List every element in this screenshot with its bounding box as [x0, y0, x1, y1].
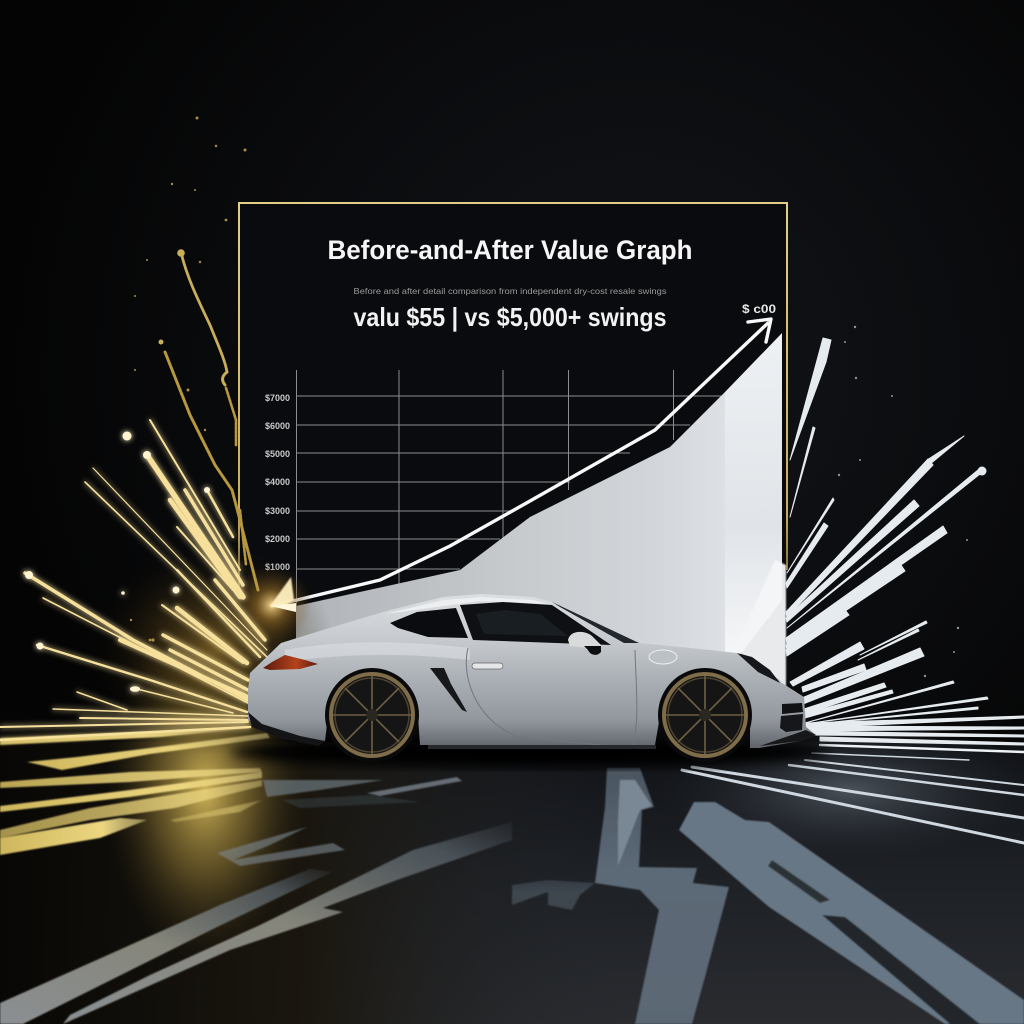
trend arrow [272, 319, 771, 606]
y-axis labels: $1000 [265, 562, 290, 572]
y-axis labels: $2000 [265, 534, 290, 544]
windscreen [552, 602, 639, 643]
car shadow [230, 736, 830, 768]
value area [296, 333, 782, 660]
glow at arrow start [232, 565, 312, 645]
front splitter [760, 730, 816, 746]
front intake [782, 703, 803, 714]
car [248, 594, 816, 762]
floor strokes: centre [512, 768, 729, 1024]
panel: graph [239, 203, 787, 623]
rear quarter window [390, 608, 468, 638]
roof highlight [385, 597, 548, 614]
white spark rays [786, 338, 1024, 745]
panel frame [239, 203, 787, 590]
upper body shoulder highlight [285, 642, 470, 662]
y-axis labels: $6000 [265, 421, 290, 431]
chart grid [296, 370, 722, 610]
floor strokes: gray left [0, 777, 512, 1024]
y-axis labels: $3000 [265, 506, 290, 516]
gold spark rays [0, 420, 267, 740]
tail light [263, 655, 318, 670]
headlight [737, 653, 780, 683]
door window [460, 602, 611, 645]
gold particles [130, 116, 246, 642]
gold spark dots [25, 432, 210, 692]
floor strokes: gold [0, 728, 270, 855]
panel background [239, 203, 787, 623]
gold splash: drips [158, 249, 258, 590]
car body [248, 594, 816, 748]
floor [0, 620, 1024, 1024]
glow behind gold rays [95, 545, 335, 755]
side sill [428, 745, 656, 749]
white particles [838, 326, 968, 677]
rear bumper dark [248, 712, 325, 746]
side vent [430, 668, 467, 712]
y-axis labels [265, 393, 290, 572]
fine-print caption: Before and after detail comparison from independent dry-cost resale swings [354, 286, 666, 296]
y-axis labels: $5000 [265, 449, 290, 459]
title: Before-and-After Value Graph [328, 235, 692, 265]
subtitle: valu $55 | vs $5,000+ swings [354, 302, 666, 332]
rear wheel [325, 668, 419, 762]
door lines [466, 648, 637, 748]
peak value label: $ c00 [742, 302, 776, 316]
mirror [568, 632, 601, 655]
door handle [472, 663, 503, 669]
y-axis labels: $7000 [265, 393, 290, 403]
floor strokes: diagonal [679, 802, 1024, 1024]
y-axis labels: $4000 [265, 477, 290, 487]
fuel cap [649, 650, 677, 664]
front wheel [658, 668, 752, 762]
white fan behind car nose [735, 560, 786, 690]
white spark dots [978, 466, 986, 476]
floor streaks: right [682, 745, 1024, 843]
